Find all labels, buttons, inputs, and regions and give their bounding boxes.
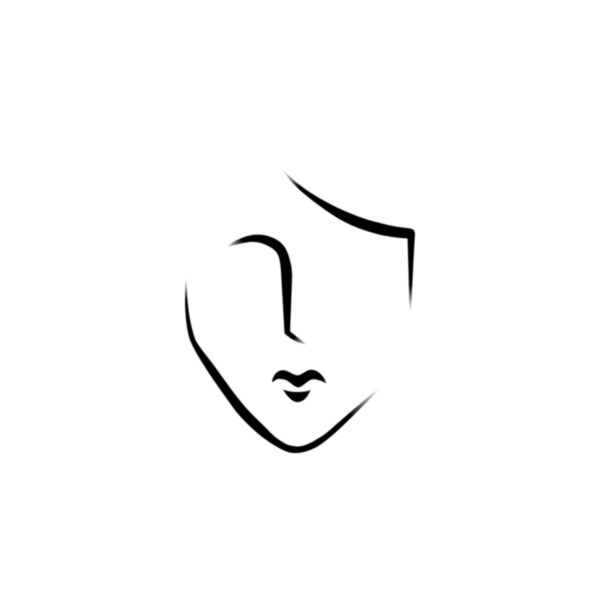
- eyebrow and nose line: [226, 235, 308, 345]
- jaw line: [185, 276, 381, 453]
- hair line: right vertical stroke: [408, 229, 415, 312]
- nose tail: [284, 331, 308, 345]
- upper lip: [272, 370, 326, 388]
- hair line: top curve: [282, 169, 415, 312]
- lower lip: [283, 390, 310, 402]
- lips: [272, 370, 326, 402]
